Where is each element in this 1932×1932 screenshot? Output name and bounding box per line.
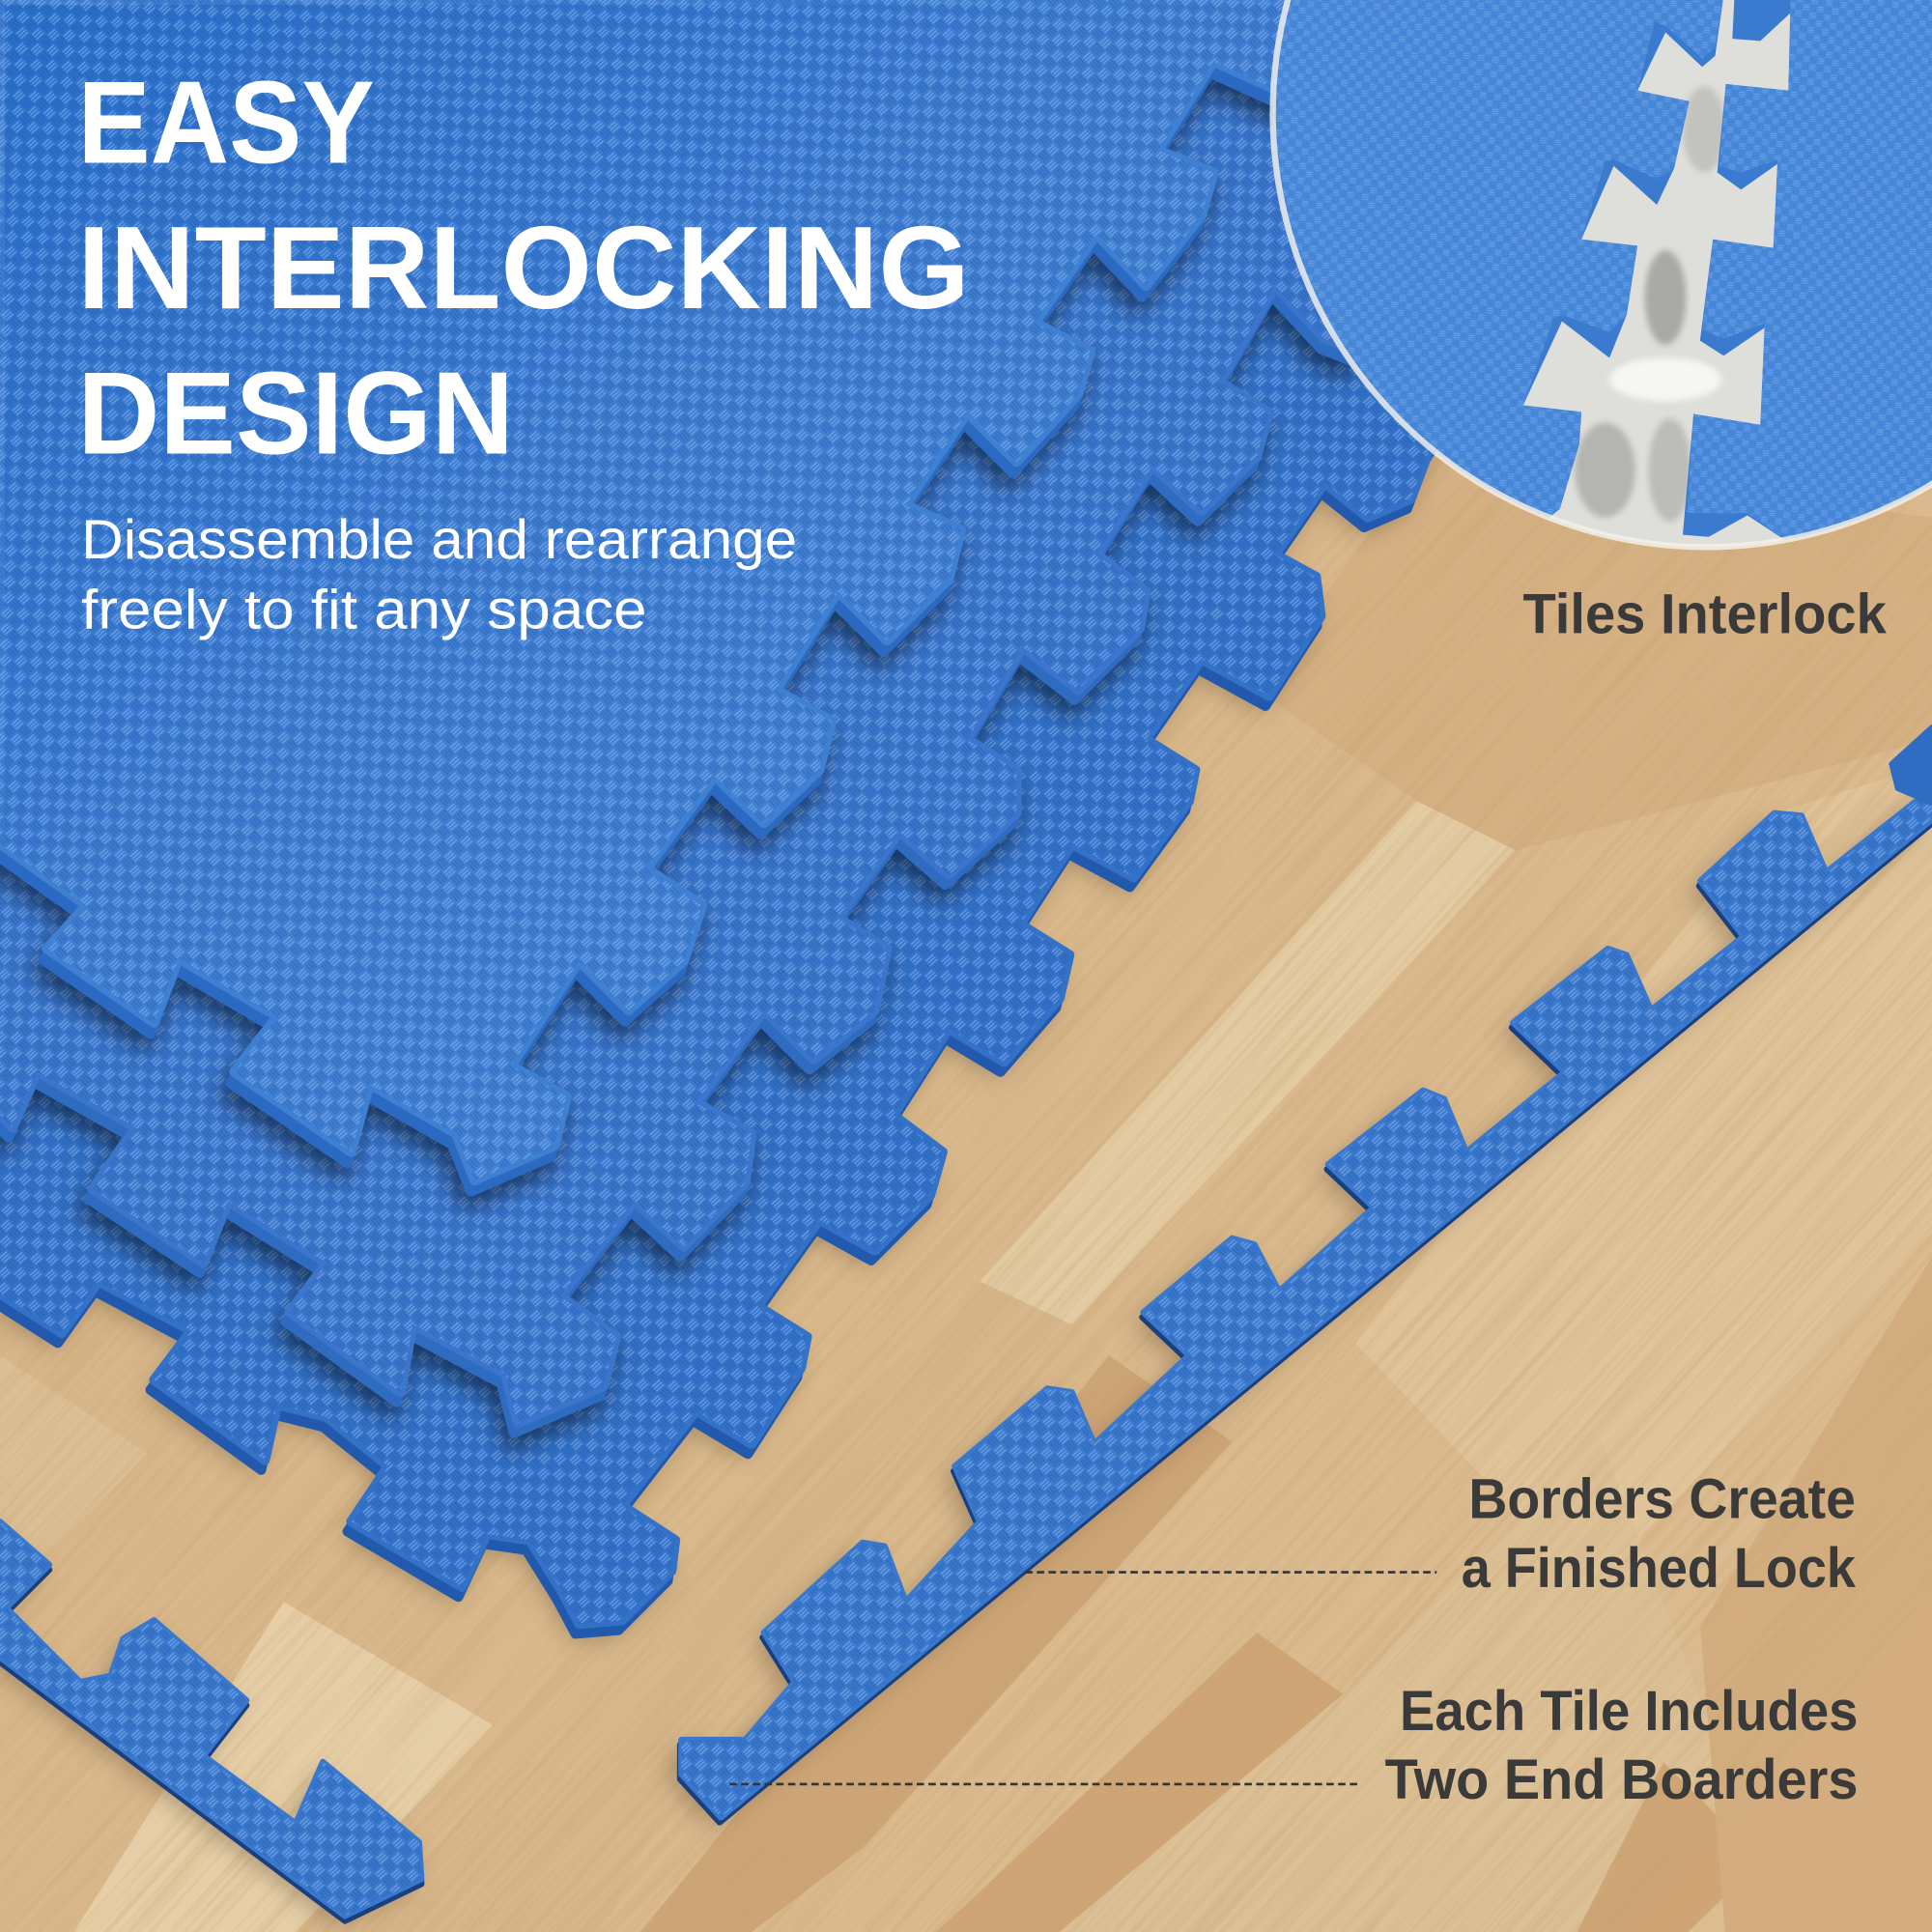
- label: tiles interlock: Tiles Interlock: [1523, 583, 1887, 646]
- title: [77, 56, 970, 478]
- label: each tile includes two end boarders: Two End Boarders: [1385, 1748, 1858, 1811]
- interlocking foam mat tiles: [0, 0, 1479, 1638]
- middle tile: [0, 0, 1355, 1433]
- left magnified tile: [1273, 0, 1723, 518]
- exposed floor gap: [1573, 85, 1723, 524]
- label: each tile includes two end boarders: Each Tile Includes: [1400, 1680, 1858, 1743]
- bottom left border strip: [0, 1521, 421, 1926]
- title: INTERLOCKING: [77, 202, 970, 333]
- inset ring: [1273, 0, 1932, 547]
- top tile: [0, 0, 1355, 1191]
- top right corner border piece: [1891, 727, 1932, 804]
- label: borders create a finished lock: Borders Create: [1468, 1467, 1856, 1530]
- label: borders create a finished lock: a Finished Lock: [1462, 1537, 1856, 1600]
- label: each tile includes two end boarders: [1385, 1680, 1858, 1811]
- subtitle: [81, 509, 797, 641]
- title: DESIGN: [77, 347, 514, 478]
- magnified inset circle: tiles interlock: [1256, 0, 1932, 560]
- title: EASY: [77, 56, 375, 187]
- right magnified tile: [1683, 0, 1932, 560]
- right border strip: [671, 788, 1932, 1828]
- bottom tile: [0, 0, 1479, 1634]
- subtitle: Disassemble and rearrange: [81, 509, 797, 571]
- leader line: borders: [1025, 1572, 1436, 1574]
- subtitle: freely to fit any space: [81, 580, 647, 641]
- label: borders create a finished lock: [1462, 1467, 1856, 1600]
- leader line: end boarders: [729, 1783, 1360, 1785]
